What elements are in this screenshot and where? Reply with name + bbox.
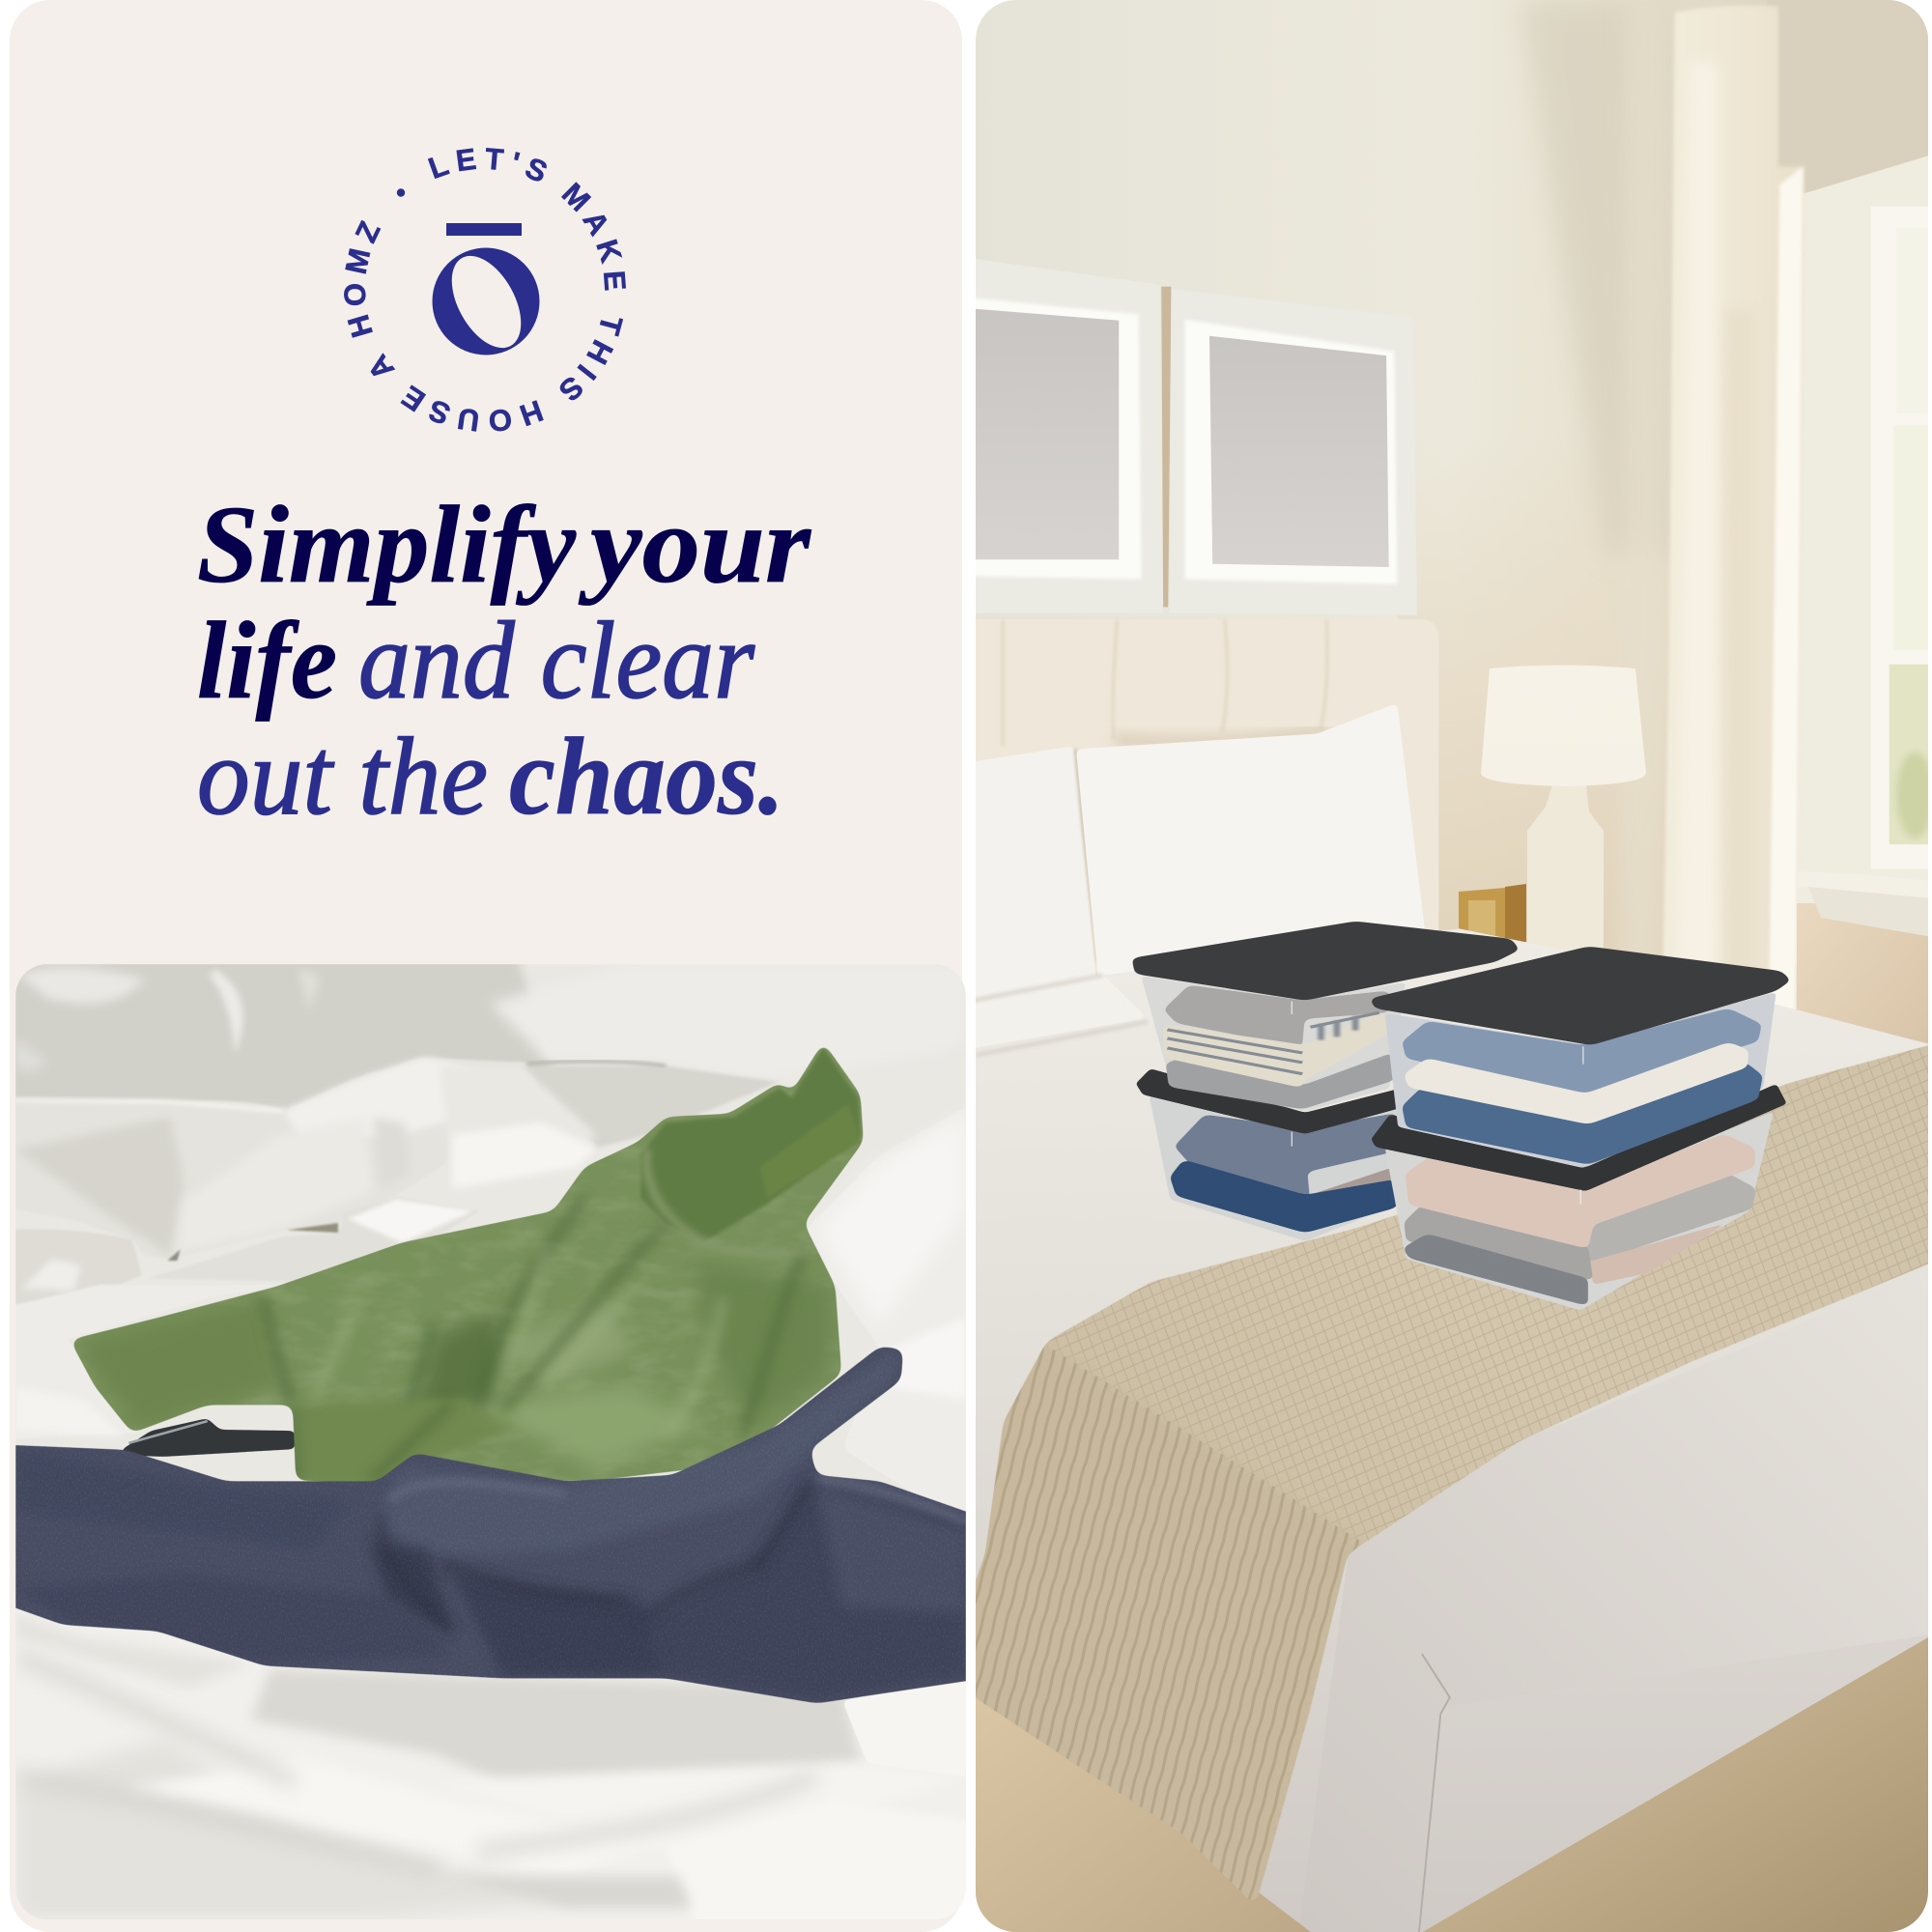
lid [1135,1068,1412,1134]
photo: messy bed with clothes [15,964,966,1919]
lamp [1481,665,1646,966]
headline: your [578,483,812,606]
headline: chaos. [509,715,784,838]
bed frame [966,1634,1932,1932]
comforter [953,928,1932,1932]
small pillow fold [7,1229,142,1304]
beige throw blanket [948,1022,1932,1932]
window sill and lower wall [1797,903,1928,1043]
lid [1131,921,1520,1001]
pillows [976,705,1425,999]
headline: and clear [358,599,755,722]
wall art frames [966,258,1417,615]
box: front right top [1292,946,1791,1205]
icon: dark hanger [120,1418,296,1457]
box: back left top [1131,921,1520,1112]
headline [197,483,812,838]
headline: life [197,599,337,722]
box: front right bottom [1371,1084,1787,1311]
logo badge [344,148,626,432]
sheets upper left detail [0,924,557,1439]
bed with throw [948,928,1932,1932]
window [1797,0,1928,903]
storage boxes [1131,921,1791,1311]
bottom duvet [15,1627,966,1919]
icon: circular text ring: LET'S MAKE THIS HOUSE A HOMZ [344,148,626,432]
panel: right photo tidy bedroom [948,0,1932,1932]
bedroom wall window and headboard [976,0,1928,1010]
under fold [160,1211,475,1280]
panel: left message card [10,0,962,1932]
icon: o with macron [433,223,539,359]
headboard [976,620,1439,972]
lid [1370,946,1791,1045]
headline: Simplify [197,483,576,606]
green shirt [63,1035,880,1493]
box: back left bottom [1135,1068,1412,1241]
headline: out the [197,715,488,838]
wall outlet [1459,884,1526,942]
wall [976,0,1928,1010]
white bed [25,1285,118,1304]
sheets right side [440,964,1006,1549]
lower left sheet [15,1386,126,1436]
duvet lump [15,1059,526,1111]
lid [1371,1084,1787,1191]
curtain [1624,6,1804,1010]
navy pants [0,1343,1006,1714]
